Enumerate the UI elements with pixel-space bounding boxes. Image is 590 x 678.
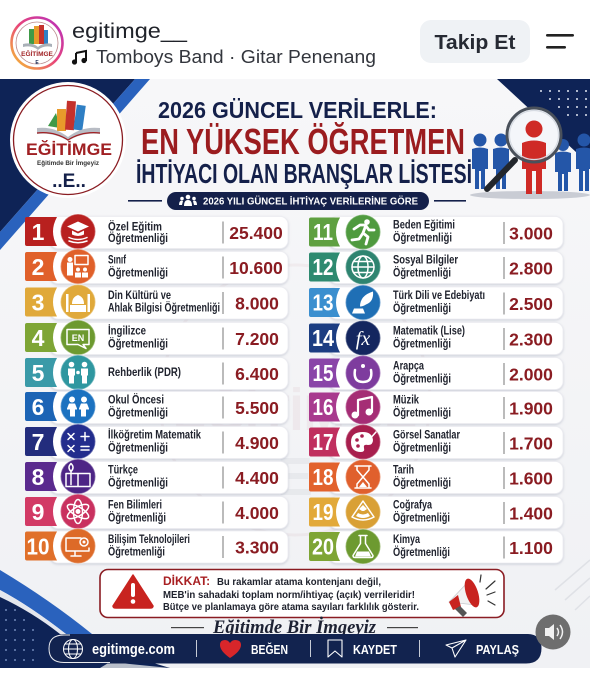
- logo letter: ..E..: [52, 171, 86, 192]
- row 1: 25.400: [229, 223, 283, 243]
- logo slogan: Eğitimde Bir İmgeyiz: [37, 159, 99, 167]
- row 13: [309, 285, 563, 320]
- row 10: Bilişim Teknolojileri: [108, 532, 190, 546]
- row 7: Öğretmenliği: [108, 440, 168, 454]
- tagline: Eğitimde Bir İmgeyiz: [212, 616, 377, 638]
- illustration: people and magnifier: [470, 108, 590, 199]
- row 11: [309, 214, 563, 250]
- follow button: [420, 20, 530, 63]
- callout: warning notice: [100, 565, 504, 620]
- like label: BEĞEN: [251, 642, 288, 657]
- notice text: Bütçe ve planlamaya göre atama sayıları farklılık gösterir.: [163, 602, 419, 613]
- title line 1: 2026 GÜNCEL VERİLERLE:: [158, 97, 437, 123]
- row 10: Öğretmenliği: [108, 544, 165, 558]
- row 13: 2.500: [509, 294, 553, 314]
- row 3: 8.000: [235, 294, 279, 314]
- red figure: [522, 120, 546, 194]
- row 2: Öğretmenliği: [108, 264, 168, 280]
- row 17: 17: [312, 429, 334, 455]
- row 20: Kimya: [393, 532, 420, 546]
- row 9: Fen Bilimleri: [108, 498, 162, 512]
- row 16: Öğretmenliği: [393, 404, 451, 420]
- row 7: İlköğretim Matematik: [108, 426, 201, 442]
- row 12: 12: [312, 254, 334, 280]
- row 8: Türkçe: [108, 462, 138, 476]
- row 5: [25, 355, 288, 390]
- row 13: Türk Dili ve Edebiyatı: [393, 288, 485, 302]
- row 17: Öğretmenliği: [393, 440, 451, 454]
- row 2: [25, 249, 288, 284]
- row 15: 15: [312, 360, 334, 386]
- icon: sound button: [536, 614, 570, 650]
- icon: warning triangle: [113, 575, 153, 608]
- row 4: [25, 320, 288, 355]
- row 14: Matematik (Lise): [393, 324, 465, 338]
- title: [136, 97, 472, 189]
- left column rows: [25, 214, 288, 564]
- icon: megaphone: [438, 565, 500, 620]
- row 9: 4.000: [235, 503, 279, 523]
- row 1: Öğretmenliği: [108, 230, 168, 245]
- row 20: [309, 529, 563, 564]
- row 5: Rehberlik (PDR): [108, 365, 181, 379]
- row 20: Öğretmenliği: [393, 544, 450, 559]
- row 18: Öğretmenliği: [393, 474, 451, 490]
- follow button: Takip Et: [434, 31, 516, 54]
- row 7: 4.900: [235, 433, 279, 453]
- blue figures: [472, 134, 590, 191]
- row 6: 5.500: [235, 398, 279, 418]
- row 15: Öğretmenliği: [393, 370, 451, 386]
- row 14: [309, 320, 563, 356]
- row 11: 3.000: [509, 224, 553, 244]
- row 17: Görsel Sanatlar: [393, 428, 460, 442]
- row 14: 2.300: [509, 330, 553, 350]
- row 11: Öğretmenliği: [393, 230, 452, 244]
- row 10: [25, 528, 288, 564]
- row 14: 14: [312, 325, 334, 351]
- icon: paper plane: [446, 640, 466, 657]
- row 6: Okul Öncesi: [108, 392, 164, 406]
- instagram post header: [12, 18, 574, 68]
- row 3: 3: [32, 290, 44, 316]
- row 12: Öğretmenliği: [393, 264, 451, 280]
- row 15: [309, 356, 563, 390]
- row 3: [25, 284, 288, 320]
- row 7: 7: [32, 429, 44, 455]
- row 12: 2.800: [509, 258, 553, 278]
- song label: Tomboys Band · Gitar Penenang: [96, 46, 376, 67]
- avatar: EĞİTİMGE: [21, 49, 54, 58]
- row 3: Din Kültürü ve: [108, 288, 171, 302]
- row 13: 13: [312, 290, 334, 316]
- notice text: DİKKAT:: [163, 573, 210, 588]
- footer bar: [49, 634, 541, 663]
- icon: music note: [72, 51, 87, 65]
- row 19: 19: [312, 499, 334, 525]
- row 17: 1.700: [509, 434, 553, 454]
- watermark: [160, 265, 430, 535]
- row 1: Özel Eğitim: [108, 218, 162, 234]
- account name: egitimge__: [72, 20, 187, 43]
- row 4: 4: [32, 325, 45, 351]
- row 1: 1: [32, 219, 45, 245]
- row 19: 1.400: [509, 504, 553, 524]
- logo badge: [10, 82, 126, 198]
- row 18: [309, 460, 563, 494]
- notice text: MEB'in sahadaki toplam norm/ihtiyaç (açık) verrileridir!: [163, 590, 415, 601]
- row 6: [25, 389, 288, 424]
- row 17: [309, 424, 563, 460]
- notice text: Bu rakamlar atama kontenjanı değil,: [217, 577, 381, 588]
- row 7: [25, 424, 288, 459]
- row 19: Öğretmenliği: [393, 510, 450, 524]
- row 10: 10: [26, 534, 50, 560]
- row 16: Müzik: [393, 392, 419, 406]
- avatar: [12, 18, 62, 68]
- row 4: Öğretmenliği: [108, 336, 168, 350]
- row 8: 8: [32, 464, 45, 490]
- row 2: Sınıf: [108, 252, 127, 266]
- row 20: 20: [312, 534, 334, 560]
- icon: menu: [546, 34, 574, 49]
- row 13: Öğretmenliği: [393, 300, 451, 315]
- row 15: 2.000: [509, 364, 553, 384]
- share label: PAYLAŞ: [476, 642, 519, 657]
- row 19: [309, 494, 563, 530]
- row 16: 16: [312, 394, 334, 420]
- notice text: [163, 573, 419, 613]
- subtitle pill: [128, 192, 466, 210]
- row 12: Sosyal Bilgiler: [393, 252, 458, 266]
- row 4: İngilizce: [108, 322, 146, 338]
- row 11: 11: [313, 219, 333, 245]
- website: egitimge.com: [92, 642, 175, 658]
- row 1: [25, 214, 288, 249]
- magnifier lens back: [507, 108, 561, 162]
- watermark: E: [277, 447, 313, 507]
- row 18: 18: [312, 464, 334, 490]
- icon: bookmark: [328, 640, 342, 657]
- row 9: Öğretmenliği: [108, 510, 166, 524]
- right column rows: [309, 214, 563, 564]
- row 2: 2: [32, 254, 44, 280]
- row 4: EN: [72, 333, 84, 343]
- row 8: Öğretmenliği: [108, 474, 168, 490]
- avatar: E: [35, 60, 39, 66]
- row 6: 6: [32, 394, 44, 420]
- row 5: 5: [32, 360, 45, 386]
- row 20: 1.100: [509, 538, 553, 558]
- row 3: Ahlak Bilgisi Öğretmenliği: [108, 300, 220, 314]
- row 16: 1.900: [509, 398, 553, 418]
- row 14: Öğretmenliği: [393, 336, 451, 350]
- row 5: 6.400: [235, 364, 279, 384]
- row 9: 9: [32, 499, 44, 525]
- row 2: 10.600: [229, 258, 283, 278]
- subtitle pill: 2026 YILI GÜNCEL İHTİYAÇ VERİLERİNE GÖRE: [203, 194, 418, 208]
- row 4: 7.200: [235, 329, 279, 349]
- row 8: 4.400: [235, 468, 279, 488]
- row 16: [309, 390, 563, 424]
- row 8: [25, 459, 288, 494]
- icon: heart: [220, 640, 241, 658]
- icon: group: [179, 195, 197, 206]
- row 11: Beden Eğitimi: [393, 218, 455, 232]
- row 15: Arapça: [393, 358, 424, 372]
- watermark: EĞİTİMGE: [173, 385, 417, 441]
- icon: globe: [64, 640, 82, 658]
- title line 2: EN YÜKSEK ÖĞRETMEN: [141, 121, 465, 162]
- logo wordmark: EĞİTİMGE: [26, 140, 112, 159]
- row 10: 3.300: [235, 538, 279, 558]
- row 9: [25, 494, 288, 529]
- magnifier: [487, 108, 561, 189]
- logo book icon: [37, 101, 100, 141]
- row 18: 1.600: [509, 468, 553, 488]
- save label: KAYDET: [353, 642, 397, 657]
- row 19: Coğrafya: [393, 498, 432, 512]
- row 14: fx: [356, 328, 370, 350]
- row 12: [309, 250, 563, 284]
- row 6: Öğretmenliği: [108, 404, 168, 420]
- row 18: Tarih: [393, 462, 414, 476]
